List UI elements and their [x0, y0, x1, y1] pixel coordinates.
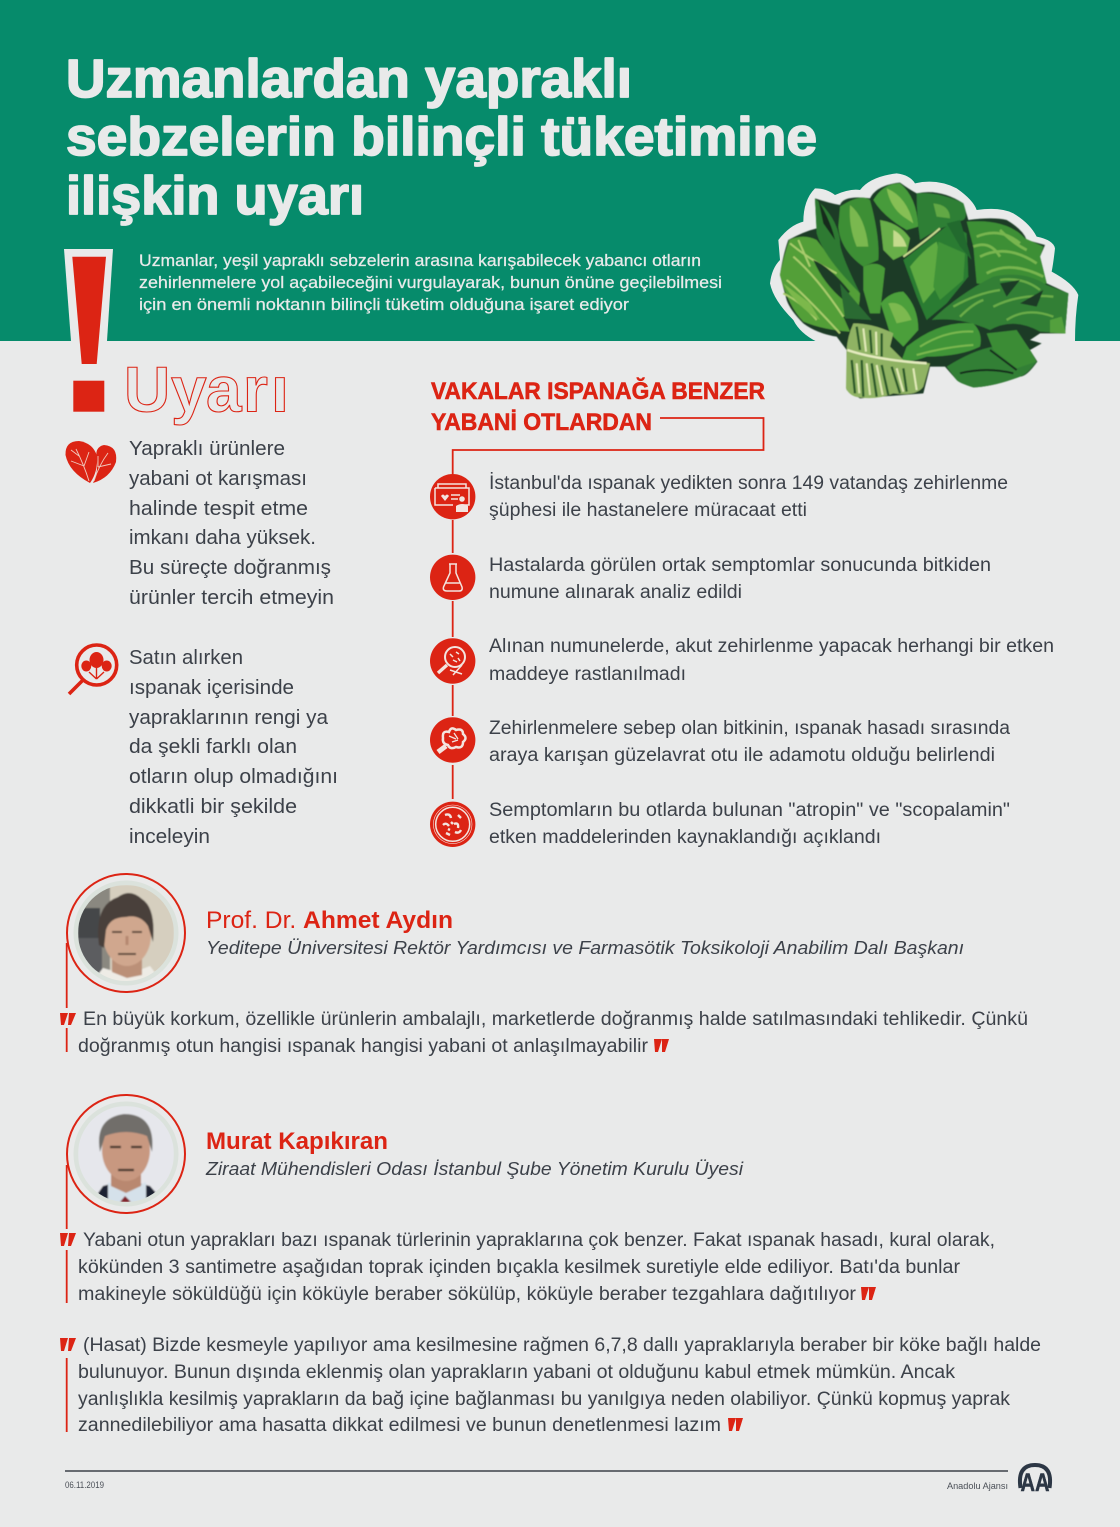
step 1 text — [489, 473, 1008, 521]
tip text 2: dikkatli bir şekilde — [129, 795, 297, 818]
step 5 icon — [430, 802, 475, 847]
step 3 icon — [430, 638, 475, 684]
step 5 text: etken maddelerinden kaynaklandığı açıklandı — [489, 827, 881, 848]
tip text 2: da şekli farklı olan — [129, 735, 297, 758]
tip text 2: Satın alırken — [129, 646, 243, 669]
panel: left tips — [65, 437, 338, 848]
portrait: Murat Kapıkıran — [67, 1095, 185, 1213]
title: sebzelerin bilinçli tüketimine — [66, 107, 817, 167]
panel: timeline — [430, 473, 1054, 848]
tip text 1: ürünler tercih etmeyin — [129, 586, 334, 609]
title: Uzmanlardan yapraklı — [66, 49, 632, 109]
tip text 1 — [129, 437, 334, 609]
quote mark open — [60, 1338, 76, 1351]
step 2 icon — [430, 555, 475, 600]
quote line — [66, 943, 68, 1052]
heading: Uyarı: Uyarı — [124, 354, 289, 426]
tip text 2: otların olup olmadığını — [129, 765, 338, 788]
quote mark open — [60, 1233, 76, 1246]
quote mark open — [60, 1013, 76, 1025]
step 3 text: Alınan numunelerde, akut zehirlenme yapacak herhangi bir etken — [489, 636, 1054, 657]
icon: spinach bunch — [770, 173, 1078, 398]
icon: magnifier with leaves — [69, 645, 117, 694]
heading: cases — [431, 377, 765, 436]
step 3 text — [489, 636, 1054, 685]
step 4 icon — [430, 717, 475, 763]
quote text 2: zannedilebiliyor ama hasatta dikkat edilmesi ve bunun denetlenmesi lazım — [78, 1415, 721, 1436]
tip text 1: yabani ot karışması — [129, 467, 307, 490]
header band — [0, 0, 1120, 341]
quote text 1: Yabani otun yaprakları bazı ıspanak türlerinin yapraklarına çok benzer. Fakat ıspanak hasadı, kural olarak, — [83, 1230, 995, 1251]
intro text: için en önemli noktanın bilinçli tüketim olduğuna işaret ediyor — [139, 295, 629, 314]
intro text: zehirlenmelere yol açabileceğini vurgulayarak, bunun önüne geçilebilmesi — [139, 273, 722, 292]
title — [66, 49, 817, 226]
heading: cases: YABANİ OTLARDAN — [431, 409, 652, 436]
tip text 2: ıspanak içerisinde — [129, 676, 294, 699]
panel: expert 2 — [60, 1095, 1041, 1436]
quote text 1: kökünden 3 santimetre aşağıdan toprak içinden bıçakla kesilmek suretiyle elde ediliyor. Batı'da bunlar — [78, 1257, 961, 1278]
step 1 text: şüphesi ile hastanelere müracaat etti — [489, 500, 807, 521]
expert name: Prof. Dr. Ahmet Aydın — [206, 907, 453, 934]
intro text — [139, 251, 722, 314]
quote text 2: bulunuyor. Bunun dışında eklenmiş olan yaprakların yabani ot olduğunu kabul etmek mümkün. Ancak — [78, 1362, 956, 1383]
quote text: En büyük korkum, özellikle ürünlerin ambalajlı, marketlerde doğranmış halde satılmasındaki tehlikedir. Çünkü — [83, 1009, 1028, 1030]
panel: expert 1 — [60, 874, 1028, 1057]
expert title: Ziraat Mühendisleri Odası İstanbul Şube Yönetim Kurulu Üyesi — [205, 1158, 744, 1179]
intro text: Uzmanlar, yeşil yapraklı sebzelerin arasına karışabilecek yabancı otların — [139, 251, 701, 270]
tip text 2 — [129, 646, 338, 848]
step 3 text: maddeye rastlanılmadı — [489, 664, 686, 685]
heading: cases: VAKALAR ISPANAĞA BENZER — [431, 377, 765, 405]
icon: two leaves — [65, 441, 116, 483]
quote mark close — [861, 1287, 876, 1300]
tip text 2: inceleyin — [129, 825, 210, 848]
tip text 2: yapraklarının rengi ya — [129, 706, 329, 729]
step 2 text — [489, 555, 991, 603]
quote mark close — [728, 1418, 743, 1431]
icon: exclamation mark — [64, 249, 113, 412]
expert title: Yeditepe Üniversitesi Rektör Yardımcısı ve Farmasötik Toksikoloji Anabilim Dalı Başkanı — [206, 937, 964, 958]
date: 06.11.2019 — [65, 1480, 104, 1490]
step 2 text: Hastalarda görülen ortak semptomlar sonucunda bitkiden — [489, 555, 991, 576]
expert name: Murat Kapıkıran — [206, 1128, 388, 1155]
icon: agency logo: AA — [1020, 1469, 1050, 1497]
step 1 text: İstanbul'da ıspanak yedikten sonra 149 vatandaş zehirlenme — [489, 473, 1008, 494]
connector timeline — [453, 418, 764, 799]
tip text 1: imkanı daha yüksek. — [129, 526, 316, 549]
tip text 1: Bu süreçte doğranmış — [129, 556, 331, 579]
quote lines — [66, 1165, 68, 1432]
quote text 1 — [78, 1230, 995, 1305]
quote text — [78, 1009, 1028, 1057]
step 4 text: araya karışan güzelavrat otu ile adamotu olduğu belirlendi — [489, 745, 995, 766]
quote text 2 — [78, 1335, 1041, 1436]
title: ilişkin uyarı — [66, 166, 364, 226]
step 5 text: Semptomların bu otlarda bulunan "atropin" ve "scopalamin" — [489, 800, 1010, 821]
portrait: Ahmet Aydın — [67, 874, 185, 992]
tip text 1: halinde tespit etme — [129, 497, 308, 520]
quote text 2: (Hasat) Bizde kesmeyle yapılıyor ama kesilmesine rağmen 6,7,8 dallı yapraklarıyla beraber bir köke bağlı halde — [83, 1335, 1041, 1356]
quote text 1: makineyle söküldüğü için köküyle beraber sökülüp, köküyle beraber tezgahlara dağıtılıyor — [78, 1284, 857, 1305]
tip text 1: Yapraklı ürünlere — [129, 437, 285, 460]
quote mark close — [654, 1039, 669, 1052]
footer — [65, 1465, 1050, 1497]
step 2 text: numune alınarak analiz edildi — [489, 582, 742, 603]
quote text: doğranmış otun hangisi ıspanak hangisi yabani ot anlaşılmayabilir — [78, 1036, 649, 1057]
quote text 2: yanlışlıkla kesilmiş yaprakların da bağ içine bağlanması bu yanılgıya neden olabiliyor. Çünkü kopmuş yaprak — [78, 1389, 1011, 1410]
step 4 text: Zehirlenmelere sebep olan bitkinin, ıspanak hasadı sırasında — [489, 718, 1010, 739]
credit: Anadolu Ajansı — [947, 1481, 1008, 1491]
step 1 icon — [430, 474, 475, 519]
step 4 text — [489, 718, 1010, 766]
step 5 text — [489, 800, 1010, 848]
